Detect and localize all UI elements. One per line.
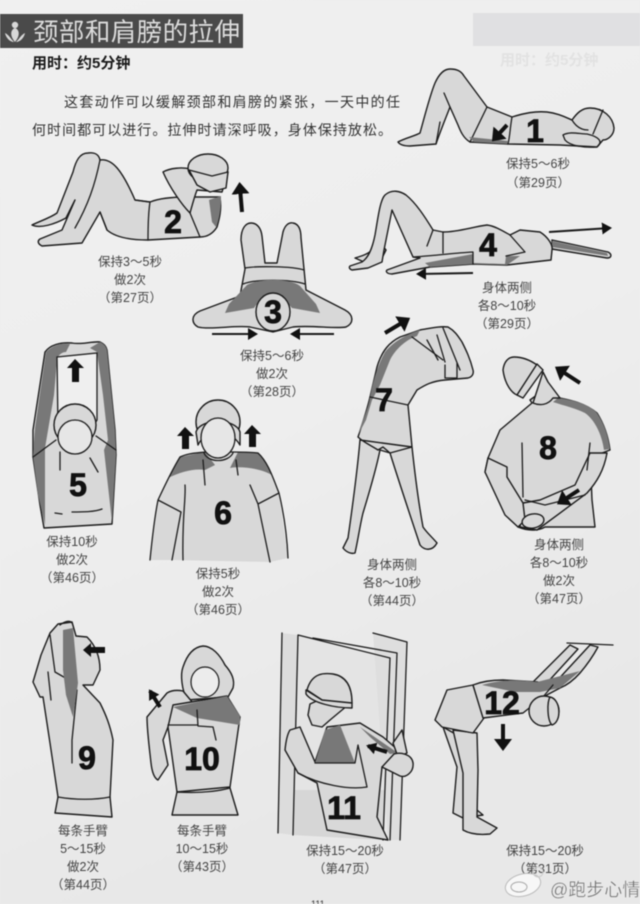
caption 1: 保持5～6秒 [506,156,570,171]
heading: 颈部和肩膀的拉伸 [33,19,240,47]
up arrows [177,427,194,449]
caption 6: （第46页） [186,603,250,617]
exercise 1 [398,69,614,190]
caption 5 [40,534,104,585]
caption 9: 5～15秒 [60,842,106,856]
exercise 9 [33,621,115,892]
stretch arrow [496,125,507,137]
caption 2: 保持3～5秒 [98,254,162,269]
caption 3: 做2次 [256,366,288,381]
arrows [212,333,256,335]
head [529,696,559,726]
number 7: 7 [375,382,393,418]
caption 10: （第43页） [170,860,234,874]
number 12: 12 [484,685,520,721]
exercise 10 [147,646,240,874]
caption 11 [306,843,384,876]
caption 4 [475,280,539,331]
arrow [368,746,387,752]
caption 9 [51,823,115,892]
caption 8: 做2次 [543,573,575,588]
arrows [549,228,610,232]
head [54,404,96,446]
caption 3: （第28页） [240,385,304,399]
caption 3 [240,348,304,399]
exercise 6 [150,400,288,617]
number 4: 4 [479,227,497,263]
caption 11: （第47页） [313,862,377,876]
intro text: 这套动作可以缓解颈部和肩膀的紧张，一天中的任 [64,94,400,110]
caption 9: 做2次 [67,859,99,874]
caption 5: 做2次 [56,552,88,567]
arrow lower [562,490,579,501]
caption 4: 身体两侧 [482,280,532,295]
arrow [150,691,160,707]
head with number [256,293,290,331]
caption 10: 每条手臂 [177,823,227,838]
caption 9: （第44页） [51,878,115,892]
head [196,400,240,444]
caption 7 [360,557,424,608]
caption 1: （第29页） [506,176,570,190]
number 6: 6 [214,495,232,531]
exercise 8 [485,357,610,606]
caption 2: 做2次 [114,272,146,287]
exercise 7 [343,321,473,608]
caption 8: 各8～10秒 [530,555,588,570]
caption 6 [186,566,250,617]
exercise 12 [435,643,613,876]
exercise 3 [193,223,352,399]
caption 12 [506,843,584,876]
number 9: 9 [78,740,96,776]
exercise 4 [349,191,611,331]
caption 1 [506,156,570,190]
caption 12: （第31页） [513,862,577,876]
arrow [560,370,580,383]
show-through from reverse page: 用时：约5分钟 [500,51,598,69]
number 5: 5 [69,467,87,503]
arrow [385,321,405,333]
number 1: 1 [526,113,544,149]
door frame [278,633,407,840]
caption 8: （第47页） [527,592,591,606]
watermark [503,867,640,900]
caption 2 [98,254,162,305]
caption 8: 身体两侧 [534,537,584,552]
caption 10 [170,823,234,874]
caption 6: 做2次 [202,584,234,599]
caption 7: 各8～10秒 [363,575,421,590]
caption 5: （第46页） [40,571,104,585]
head [306,674,352,727]
intro text [32,94,400,138]
number 3: 3 [264,294,282,330]
caption 9: 每条手臂 [58,823,108,838]
number 2: 2 [164,204,182,240]
exercise 5 [33,342,116,585]
number 11: 11 [327,790,361,826]
duration line: 用时：约5分钟 [32,54,130,72]
watermark text: @跑步心情 [550,880,640,900]
arrow [83,643,105,657]
caption 4: （第29页） [475,317,539,331]
icon: lotus [5,22,25,42]
up arrow [67,359,84,382]
exercise 11 [278,633,413,876]
caption 7: （第44页） [360,594,424,608]
caption 2: （第27页） [98,291,162,305]
arrow [501,724,505,745]
caption 10: 10～15秒 [176,842,228,856]
head [188,154,228,182]
caption 5: 保持10秒 [46,534,98,549]
caption 12: 保持15～20秒 [506,843,584,858]
intro text: 何时间都可以进行。拉伸时请深呼吸，身体保持放松。 [32,122,392,138]
title banner [0,14,243,48]
caption 4: 各8～10秒 [478,298,536,313]
stretch arrow [240,188,242,212]
caption 6: 保持5秒 [196,566,240,581]
show-through from reverse page [473,13,640,69]
caption 11: 保持15～20秒 [306,843,384,858]
exercise 2 [32,153,242,305]
caption 7: 身体两侧 [367,557,417,572]
caption 3: 保持5～6秒 [240,348,304,363]
number 8: 8 [539,430,557,466]
number 10: 10 [184,741,220,777]
icon: weibo logo [503,867,543,900]
head [503,357,560,405]
caption 8 [527,537,591,606]
